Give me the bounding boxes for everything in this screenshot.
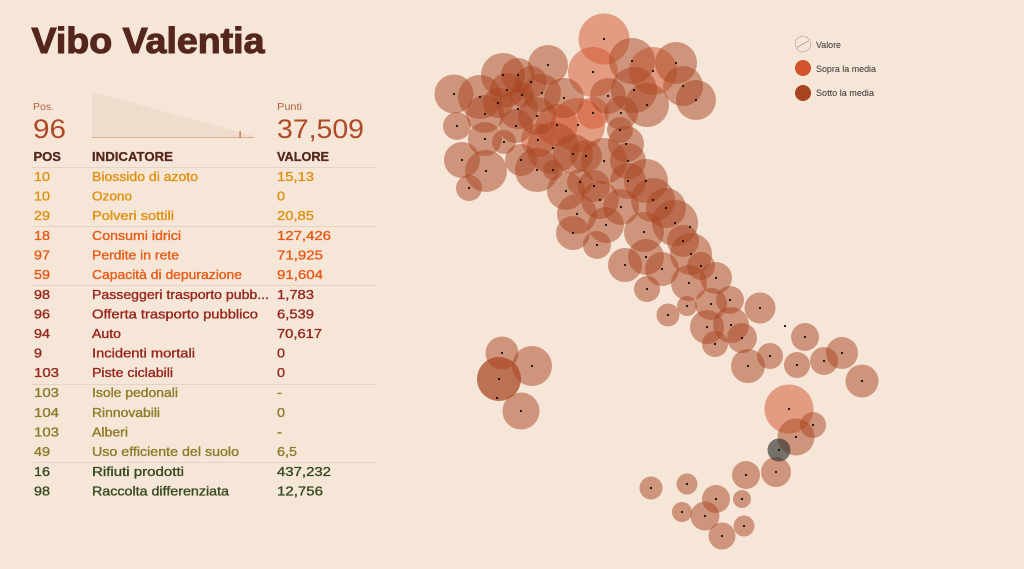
table group: environment: 49 <box>34 444 50 459</box>
table group: mobility: 103 <box>34 365 59 380</box>
table group: mobility: 6,539 <box>277 306 314 322</box>
table group: environment: Isole pedonali <box>92 385 178 400</box>
table group: environment: 104 <box>34 405 59 420</box>
table group: mobility: 0 <box>277 365 285 380</box>
table group: air: Polveri sottili <box>92 208 174 223</box>
table header: POS <box>34 149 61 164</box>
position stat: 96 <box>33 114 66 144</box>
score stat: 37,509 <box>277 114 364 144</box>
table group: water: 91,604 <box>277 267 323 282</box>
score stat <box>277 101 364 144</box>
title: Vibo Valentia <box>32 20 266 61</box>
table group: waste: Rifiuti prodotti <box>92 464 184 479</box>
table group: water: Consumi idrici <box>92 228 181 243</box>
table group: environment: - <box>277 385 282 400</box>
table group: air <box>34 169 314 223</box>
table group: air: 0 <box>277 188 285 204</box>
ranking distribution chart <box>92 92 254 138</box>
table header <box>34 149 329 164</box>
highlighted province: Vibo Valentia <box>768 438 790 462</box>
table group: water: Capacità di depurazione <box>92 267 242 282</box>
table group: waste: 437,232 <box>277 464 331 479</box>
table group: mobility: 98 <box>34 287 50 302</box>
table group: mobility <box>34 287 322 380</box>
table group: environment: Rinnovabili <box>92 405 160 420</box>
table group: mobility: Passeggeri trasporto pubb... <box>92 287 269 302</box>
table group: mobility: 9 <box>34 346 42 360</box>
table group: mobility: 94 <box>34 326 50 341</box>
legend <box>795 36 876 101</box>
table group: water <box>34 228 331 282</box>
table group: mobility: 1,783 <box>277 287 314 302</box>
table group: environment: Uso efficiente del suolo <box>92 444 239 459</box>
legend item: value: Valore <box>816 40 841 50</box>
table group: water: 97 <box>34 248 50 262</box>
table group: mobility: 70,617 <box>277 326 322 341</box>
table header: VALORE <box>277 149 329 164</box>
table group: mobility: Offerta trasporto pubblico <box>92 306 258 322</box>
table group: water: 71,925 <box>277 248 323 262</box>
table group: mobility: 96 <box>34 306 50 322</box>
legend item: below average: Sotto la media <box>816 88 874 98</box>
table group: environment: - <box>277 424 282 440</box>
table group: waste: 16 <box>34 464 50 479</box>
table group: environment: 103 <box>34 385 59 400</box>
table group: air: Ozono <box>92 188 132 204</box>
score stat: Punti <box>277 101 302 113</box>
bubble map of Italian provinces <box>434 14 878 550</box>
table group: mobility: Incidenti mortali <box>92 346 195 360</box>
table group: air: 10 <box>34 169 50 184</box>
position stat: Pos. <box>33 101 54 113</box>
table header: INDICATORE <box>92 149 173 164</box>
table group: air: 29 <box>34 208 50 223</box>
table group: water: 127,426 <box>277 228 331 243</box>
table group: waste <box>34 464 331 498</box>
table group: environment: 0 <box>277 405 285 420</box>
table group: water: 59 <box>34 267 50 282</box>
table group: waste: Raccolta differenziata <box>92 484 230 498</box>
table group: air: 15,13 <box>277 169 314 184</box>
table group: air: 10 <box>34 188 50 204</box>
table group: environment: 103 <box>34 424 59 440</box>
table group: environment: Alberi <box>92 424 128 440</box>
table group: air: Biossido di azoto <box>92 169 198 184</box>
table group: mobility: 0 <box>277 346 285 360</box>
table group: environment: 6,5 <box>277 444 297 459</box>
legend item: above average: Sopra la media <box>816 64 876 74</box>
table group: environment <box>34 385 297 459</box>
table group: waste: 98 <box>34 484 50 498</box>
table group: air: 20,85 <box>277 208 314 223</box>
table group: water: 18 <box>34 228 50 243</box>
table group: mobility: Auto <box>92 326 121 341</box>
position stat <box>33 101 66 144</box>
table group: water: Perdite in rete <box>92 248 179 262</box>
table group: waste: 12,756 <box>277 484 323 498</box>
table group: mobility: Piste ciclabili <box>92 365 173 380</box>
